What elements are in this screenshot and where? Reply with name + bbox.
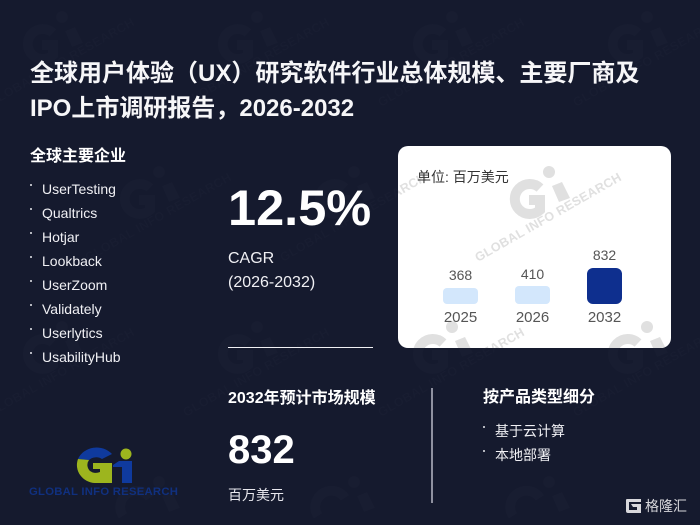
panel: 2032 market size: [228, 389, 376, 503]
market size value: 832: [228, 428, 295, 472]
panel: key companies: [30, 147, 126, 365]
logo: Global Info Research: [29, 448, 178, 498]
bar 2032: [587, 247, 622, 304]
title: [30, 60, 639, 122]
bar rect 2026: [515, 286, 550, 304]
product type list: 本地部署: [495, 447, 551, 463]
brand icon: [626, 499, 641, 513]
company list: UsabilityHub: [42, 349, 121, 365]
market size heading: 2032年预计市场规模: [228, 390, 376, 407]
title: 全球用户体验（UX）研究软件行业总体规模、主要厂商及: [30, 60, 639, 87]
company list: UserZoom: [42, 277, 107, 293]
CAGR label: CAGR: [228, 250, 274, 267]
market size unit: 百万美元: [228, 487, 284, 503]
chart unit label: 单位: 百万美元: [417, 169, 509, 185]
brand name: 格隆汇: [645, 498, 687, 514]
CAGR underline: [228, 347, 373, 348]
x axis labels: 2032: [588, 309, 621, 326]
company list: [30, 181, 121, 365]
brand mark: bottom right: [626, 498, 687, 514]
vertical divider: [431, 388, 432, 503]
product type list: 基于云计算: [495, 423, 565, 439]
title: IPO上市调研报告，2026-2032: [30, 95, 354, 122]
company list: Qualtrics: [42, 205, 97, 221]
company list: Hotjar: [42, 229, 79, 245]
product types heading: 按产品类型细分: [483, 389, 595, 406]
bar 2026: [515, 266, 550, 304]
card watermark: [398, 166, 665, 348]
company list: Validately: [42, 301, 102, 317]
x axis labels: [444, 309, 621, 326]
company list: UserTesting: [42, 181, 116, 197]
bar 2025: [443, 267, 478, 304]
panel: CAGR: [228, 179, 373, 348]
panel: product types: [483, 388, 595, 463]
value 832: 832: [593, 247, 616, 263]
bar rect 2025: [443, 288, 478, 304]
CAGR value: 12.5%: [228, 179, 371, 236]
heading: key companies: 全球主要企业: [30, 148, 126, 165]
x axis labels: 2025: [444, 309, 477, 326]
logo mark: [76, 448, 132, 483]
company list: Userlytics: [42, 325, 103, 341]
panel: bar chart card: [398, 146, 671, 348]
product type list: [483, 423, 565, 463]
CAGR label: [228, 250, 315, 291]
company list: Lookback: [42, 253, 102, 269]
x axis labels: 2026: [516, 309, 549, 326]
value 410: 410: [521, 266, 544, 282]
value 368: 368: [449, 267, 472, 283]
bar rect 2032: [587, 268, 622, 304]
CAGR label: (2026-2032): [228, 274, 315, 291]
logo wordmark: GLOBAL INFO RESEARCH: [29, 486, 178, 498]
